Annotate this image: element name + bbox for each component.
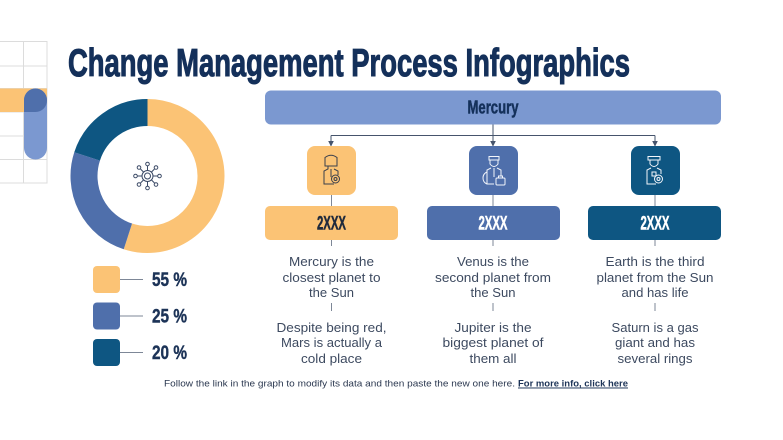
year box — [588, 206, 721, 240]
text: Earth — [596, 254, 714, 300]
header bar: Mercury: Mercury — [468, 96, 519, 118]
text: Venus: second planet from — [435, 270, 551, 285]
footer note: For more info, click here — [518, 378, 628, 390]
text: Saturn — [612, 320, 699, 366]
text: Earth: and has life — [622, 285, 688, 300]
text: Jupiter — [442, 320, 544, 366]
text: Venus — [435, 254, 551, 300]
column 1 — [265, 146, 398, 366]
legend item: 20 %: 20 % — [152, 343, 187, 364]
donut chart — [84, 112, 211, 240]
icon: person with gear on yellow tile — [307, 146, 356, 195]
decorative grid with pill — [0, 42, 47, 183]
year box: 2XXX — [317, 214, 346, 234]
text: Jupiter: Jupiter is the — [454, 320, 532, 335]
column 3 — [588, 146, 721, 366]
legend — [93, 266, 187, 366]
text: Mercury: the Sun — [309, 285, 354, 300]
column 2 — [427, 146, 560, 366]
text: Mars: Despite being red, — [276, 320, 386, 335]
footer note: Follow the link in the graph to modify its data and then paste the new one here. — [164, 378, 515, 390]
icon: person with gear on navy tile — [631, 146, 680, 195]
year box: 2XXX — [478, 214, 508, 234]
legend item: 55 %: 55 % — [152, 270, 187, 291]
text: Saturn: several rings — [618, 351, 693, 366]
connector arrows — [329, 124, 657, 311]
text: Earth: planet from the Sun — [596, 270, 714, 285]
text: Saturn: Saturn is a gas — [612, 320, 699, 335]
text: Mars — [276, 320, 386, 366]
text: Mars: cold place — [301, 351, 362, 366]
header bar: Mercury — [265, 90, 721, 124]
text: Jupiter: biggest planet of — [442, 335, 544, 350]
year box — [265, 206, 398, 240]
text: Mars: Mars is actually a — [281, 335, 383, 350]
text: Jupiter: them all — [470, 351, 517, 366]
text: Mercury — [282, 254, 380, 300]
icon: person with gear and briefcase on blue tile — [469, 146, 518, 195]
text: Mercury: Mercury is the — [289, 254, 374, 269]
year box — [427, 206, 560, 240]
text: Earth: Earth is the third — [606, 254, 704, 269]
icon: network hub — [134, 162, 161, 190]
text: Venus: the Sun — [470, 285, 516, 300]
text: Venus: Venus is the — [457, 254, 529, 269]
legend item: 25 %: 25 % — [152, 306, 187, 328]
text: Saturn: giant and has — [615, 335, 695, 350]
year box: 2XXX — [640, 214, 670, 234]
text: Mercury: closest planet to — [282, 270, 380, 285]
